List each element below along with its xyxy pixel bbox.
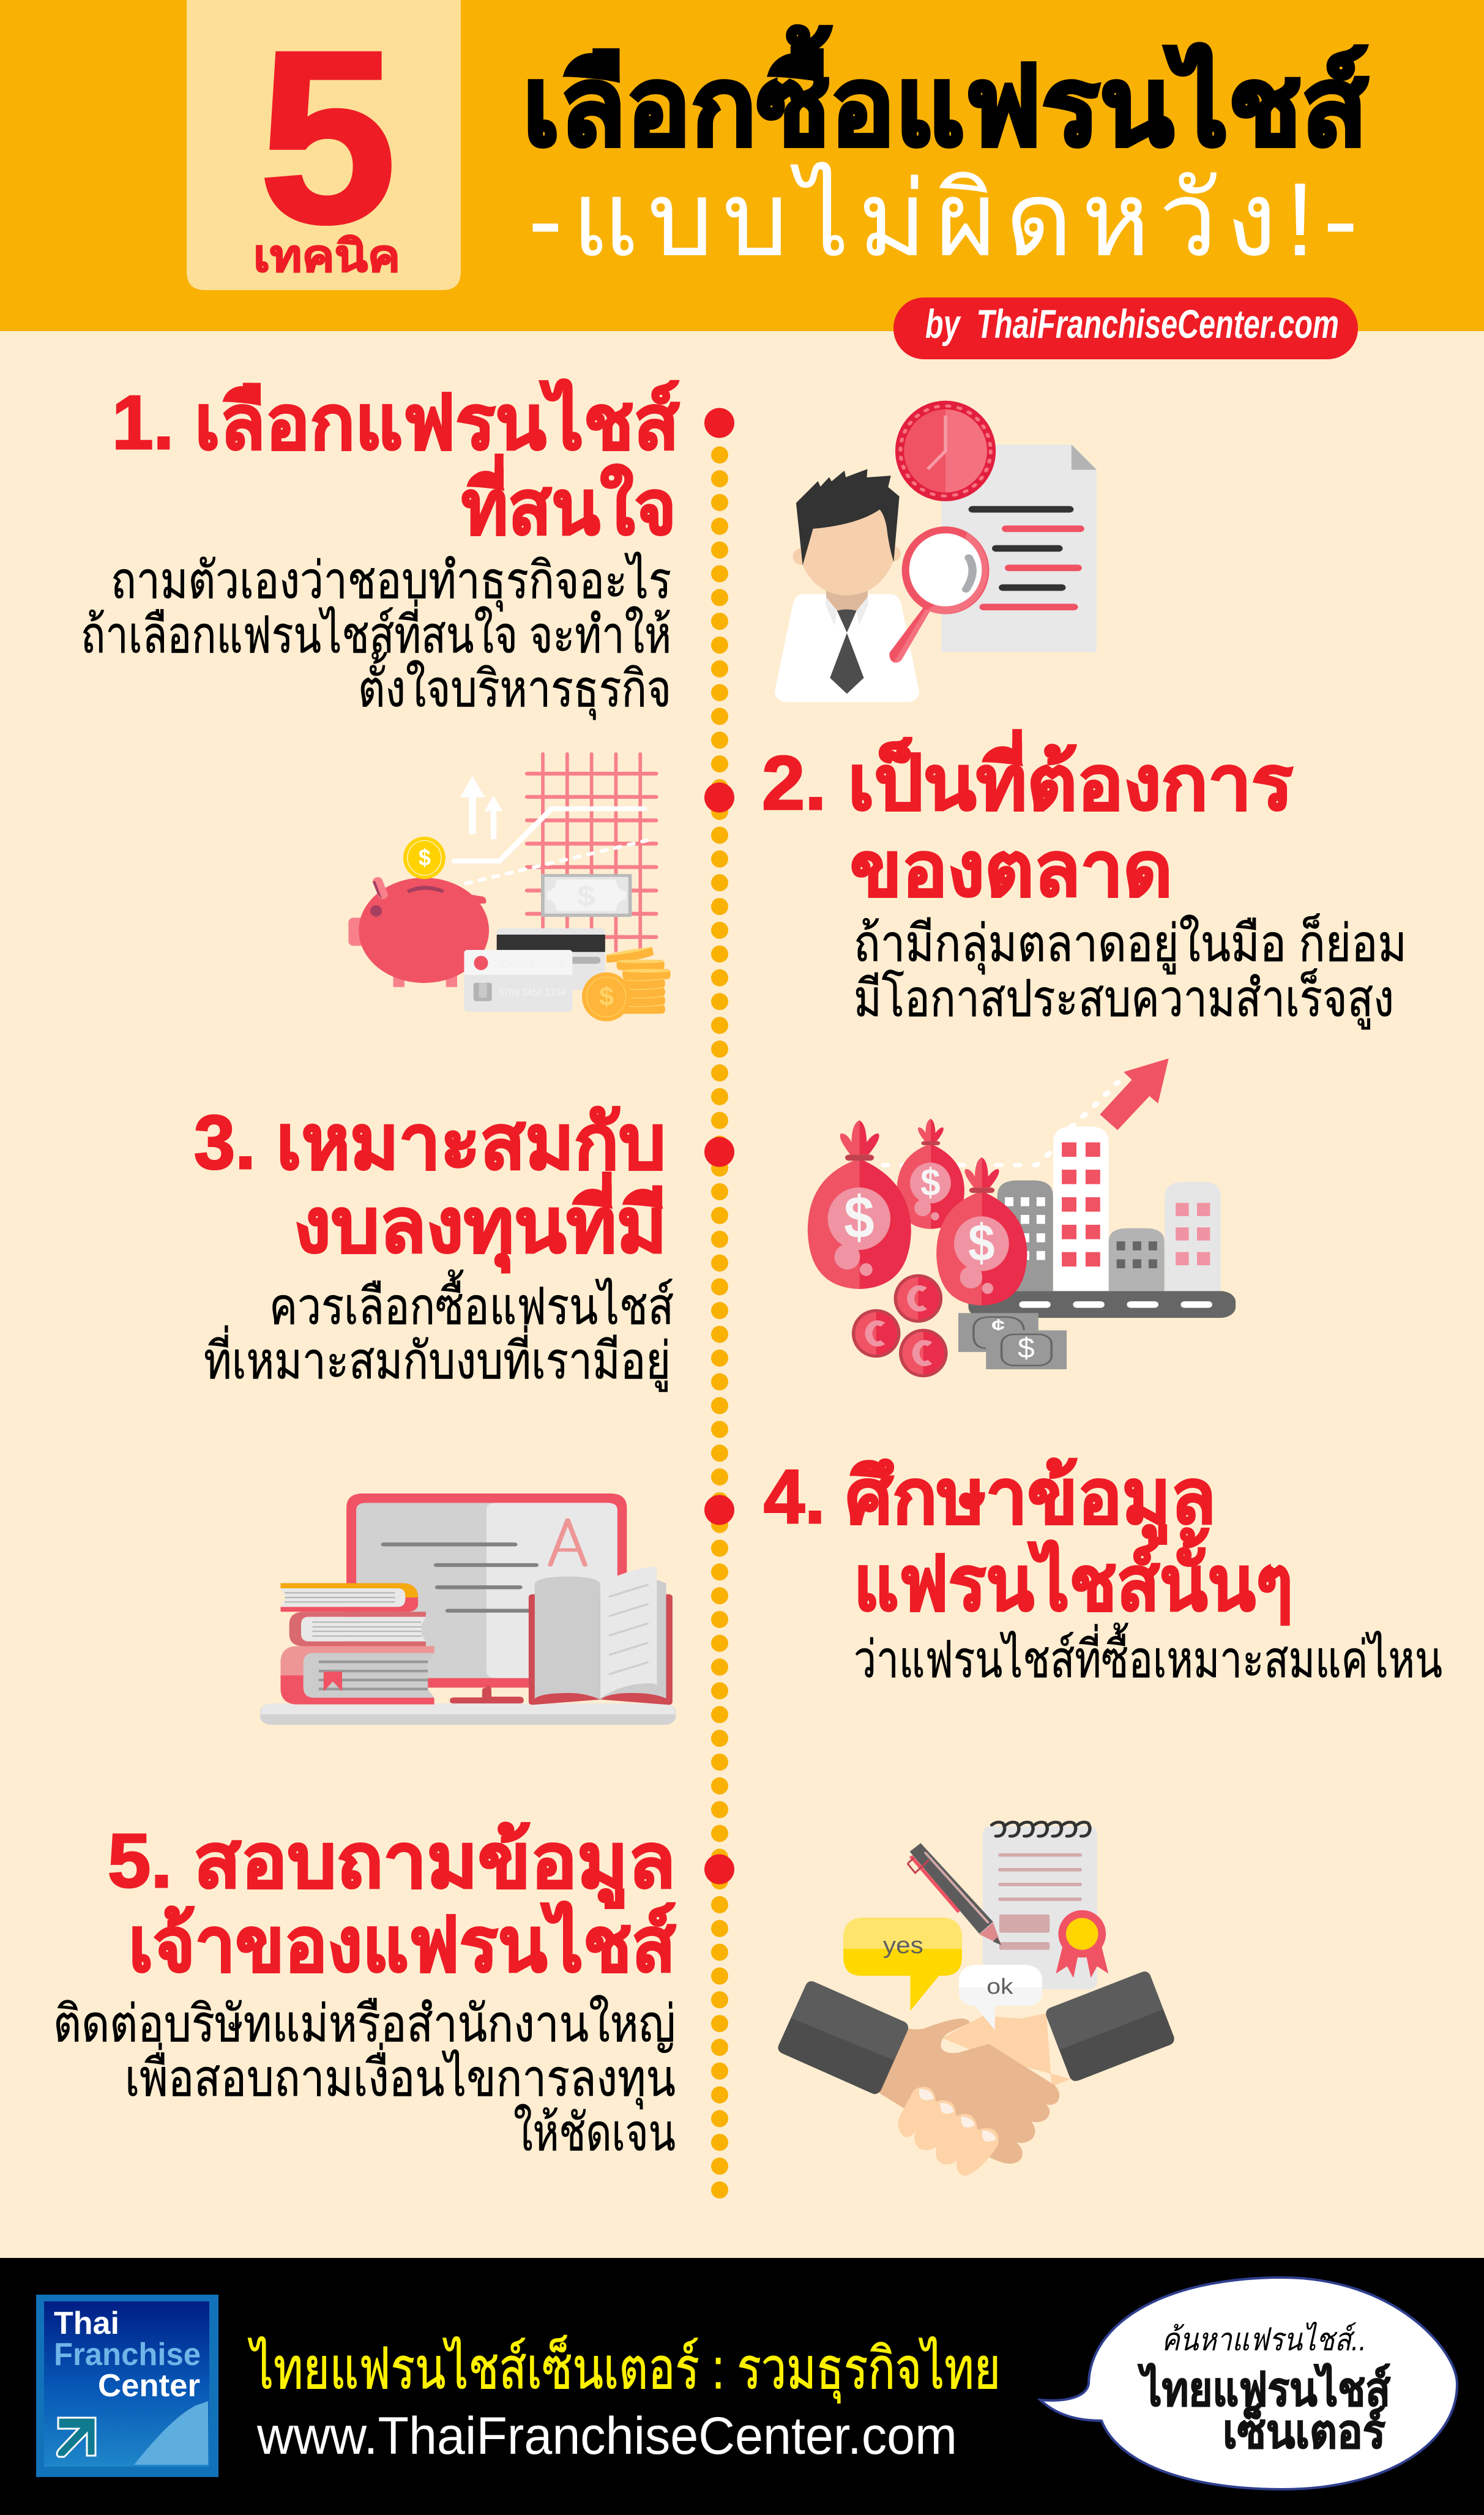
label: techniques: เทคนิค: [253, 232, 400, 281]
panel: step 3 text: [194, 1101, 674, 1392]
speech bubble: yes: yes: [883, 1933, 923, 1959]
heading 3: 3. เหมาะสมกับ: [194, 1101, 666, 1185]
description 1: ถ้าเลือกแฟรนไชส์ที่สนใจ จะทำให้: [81, 599, 671, 663]
hands: [878, 2013, 1071, 2176]
timeline: [704, 408, 734, 2190]
heading 1: 1. เลือกแฟรนไชส์: [112, 379, 679, 465]
description 2: [854, 913, 1407, 1030]
logo: Thai: [54, 2306, 119, 2341]
icon: piggy bank with chart, cards and coins: 6789 3456 1234: [499, 988, 566, 998]
subtitle: -แบบไม่ผิดหวัง!-: [528, 162, 1358, 278]
panel: step 1 text: [81, 379, 679, 720]
description 5: เพื่อสอบถามเงื่อนไขการลงทุน: [125, 2042, 676, 2110]
open book: [529, 1566, 673, 1705]
panel: step 4 text: [764, 1455, 1442, 1688]
speech bubble: search callout: ค้นหาแฟรนไชส์..: [1161, 2322, 1367, 2358]
description 2: ถ้ามีกลุ่มตลาดอยู่ในมือ ก็ย่อม: [854, 913, 1407, 975]
icon: piggy bank with chart, cards and coins: $: [559, 958, 565, 970]
speech bubble: search callout: [1040, 2278, 1457, 2489]
money bag back: [897, 1119, 964, 1229]
coins: [852, 1274, 948, 1377]
heading 1 line 2: ที่สนใจ: [461, 454, 676, 550]
description 3: ควรเลือกซื้อแฟรนไชส์: [269, 1269, 674, 1335]
heading 5: 5. สอบถามข้อมูล: [108, 1819, 676, 1908]
icon: books and computer monitor: [260, 1493, 676, 1725]
notepad: [983, 1822, 1108, 1989]
icon: piggy bank with chart, cards and coins: $: [577, 880, 595, 912]
description 5: [53, 1995, 676, 2161]
footer tagline: ไทยแฟรนไชส์เซ็นเตอร์ : รวมธุรกิจไทย: [248, 2334, 1001, 2404]
footer band: [0, 2258, 1484, 2515]
description 5: ติดต่อบริษัทแม่หรือสำนักงานใหญ่: [53, 1995, 676, 2053]
speech bubble: ok: [959, 1965, 1042, 2030]
icon: piggy bank with chart, cards and coins: [348, 754, 671, 1022]
banknotes: [958, 1313, 1067, 1369]
description 1: ตั้งใจบริหารธุรกิจ: [358, 652, 671, 720]
money bag back: $: [920, 1160, 941, 1204]
header band: [0, 0, 1484, 359]
logo: [36, 2295, 218, 2477]
money bag front: $: [968, 1214, 995, 1272]
icon: logo arrow: [57, 2418, 95, 2457]
heading 5 line 2: เจ้าของแฟรนไชส์: [129, 1902, 676, 1987]
icon: piggy bank with chart, cards and coins: $: [419, 845, 431, 870]
panel: number badge: [187, 0, 461, 290]
icon: handshake with contract and speech bubbles: [778, 1822, 1174, 2176]
description 3: ที่เหมาะสมกับงบที่เรามีอยู่: [204, 1325, 671, 1392]
description 5: ให้ชัดเจน: [513, 2104, 676, 2161]
footer url: www.ThaiFranchiseCenter.com: [256, 2407, 957, 2465]
panel: step 2 text: [762, 730, 1407, 1030]
heading 2: 2. เป็นที่ต้องการ: [762, 730, 1293, 826]
money bag front: [936, 1157, 1027, 1306]
heading 4 line 2: แฟรนไชส์นั้นๆ: [854, 1528, 1293, 1626]
byline pill: [893, 297, 1358, 359]
title: เลือกซื้อแฟรนไชส์: [523, 26, 1368, 168]
pen: [908, 1843, 1001, 1945]
book stack: [281, 1583, 434, 1705]
description 1: ถามตัวเองว่าชอบทำธุรกิจอะไร: [111, 551, 671, 612]
banknotes: ¢: [991, 1316, 1005, 1336]
cuff left: [778, 1981, 908, 2094]
icon: piggy bank with chart, cards and coins: $: [599, 982, 614, 1011]
logo: Center: [98, 2368, 200, 2404]
speech bubble: ok: ok: [986, 1975, 1013, 1999]
cuff right: [1046, 1971, 1174, 2081]
icon: piggy bank with chart, cards and coins: CARD: [501, 958, 534, 970]
heading 4: 4. ศึกษาข้อมูล: [764, 1455, 1216, 1544]
description 1: [81, 551, 671, 720]
panel: step 5 text: [53, 1819, 676, 2161]
money bag left: [808, 1120, 911, 1289]
speech bubble: search callout: เซ็นเตอร์: [1223, 2404, 1385, 2458]
heading 2 line 2: ของตลาด: [850, 828, 1173, 912]
speech bubble: yes: [843, 1918, 962, 2011]
byline pill: by ThaiFranchiseCenter.com: [925, 301, 1339, 346]
money bag left: $: [844, 1184, 874, 1250]
logo: Franchise: [54, 2337, 201, 2372]
speech bubble: search callout: ไทยแฟรนไชส์: [1138, 2363, 1391, 2416]
description 3: [204, 1269, 674, 1392]
icon: businessman with document, clock and magnifier: [775, 401, 1097, 702]
icon: money bags, coins and city buildings: [808, 1058, 1236, 1377]
heading 3 line 2: งบลงทุนที่มี: [294, 1172, 667, 1273]
banknotes: $: [1018, 1332, 1035, 1364]
big number 5: 5: [259, 0, 397, 274]
